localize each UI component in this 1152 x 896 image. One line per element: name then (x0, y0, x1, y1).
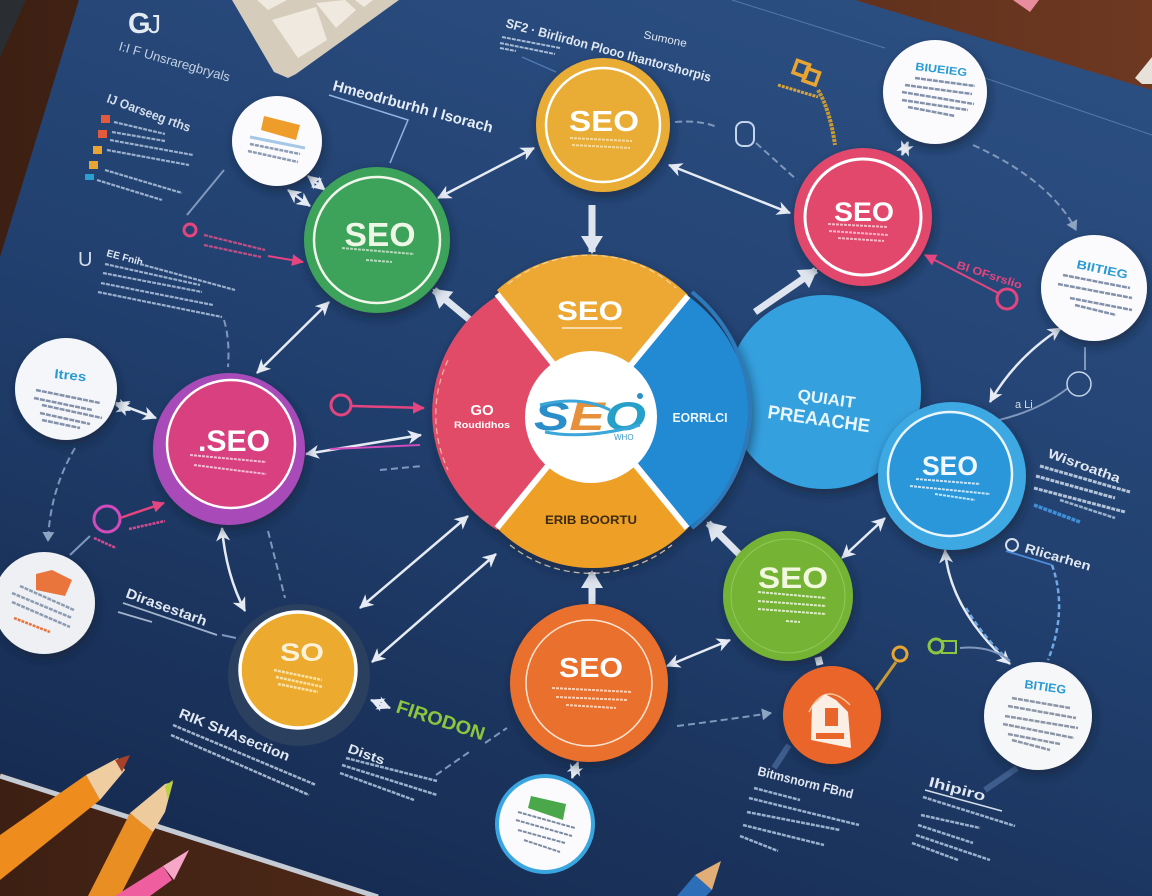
node: purple SEO: .SEO (198, 425, 270, 458)
desk objects: top corners (0, 0, 1152, 84)
thin solid connectors (70, 170, 1085, 661)
wheel labels: GO (470, 402, 494, 419)
node: lime SEO: SEO (758, 562, 828, 595)
heading: middle search label: Hmeodrburhh I Isorach (331, 77, 495, 137)
node: purple SEO (153, 373, 305, 525)
small text block: left middle: U (78, 249, 92, 271)
callout: top right (883, 40, 987, 144)
node: sky blue SEO right: SEO (922, 451, 978, 481)
header title block: I:I F Unsraregbryals (117, 38, 232, 85)
icon: small badge (736, 122, 754, 146)
node: amber SEO bottom left: SO (280, 639, 324, 667)
callout: lower left (0, 552, 95, 654)
node: yellow SEO top: SEO (569, 106, 639, 138)
wheel hub logo: SEO (534, 395, 646, 439)
top heading labels: SF2 · Birlirdon Plooo Ihantorshorpis (504, 15, 713, 85)
small text block: upper left list (85, 91, 193, 200)
icon: orange key top (778, 60, 835, 145)
icon: link chain lower right (876, 639, 956, 690)
label: bottom left text: RIK SHAsection (177, 705, 292, 764)
text block: bottom right (912, 773, 1015, 860)
callout: top left (232, 96, 322, 186)
pencil: orange (0, 755, 130, 880)
pencil: blue (677, 861, 721, 896)
pencil: pink (115, 850, 189, 896)
pencil: amber (88, 780, 173, 896)
text block: right side: Wisroatha (1046, 446, 1123, 486)
header title block: G (128, 8, 151, 40)
callout: bottom right (984, 662, 1092, 770)
green label: FIRODON (393, 697, 487, 745)
small text block: left middle: EE Fnih (105, 248, 144, 269)
small text block: left middle (78, 248, 235, 317)
wheel labels (454, 296, 728, 527)
label: bottom left text (171, 705, 316, 795)
node: pink SEO top right (794, 148, 932, 286)
label: right lower heading: Rlicarhen (1023, 540, 1093, 574)
header title block (117, 8, 232, 85)
wheel hub logo: WHO (614, 433, 634, 442)
small text block: upper left list: IJ Oarseeg rths (105, 91, 193, 135)
callout: bottom (497, 776, 593, 872)
wheel labels: Roudidhos (454, 420, 510, 430)
text block: right side: a Li (1015, 399, 1033, 411)
connector arrows (116, 142, 1061, 778)
node: amber SEO bottom left (228, 604, 370, 746)
node: sky blue SEO right (878, 402, 1026, 550)
node: green SEO (304, 167, 450, 313)
callout: right: BIITIEG (1075, 257, 1129, 282)
central wheel (432, 254, 750, 573)
node: orange SEO bottom (510, 604, 668, 762)
wheel hub logo (525, 351, 657, 483)
heading: middle search label (329, 77, 495, 163)
pink line under purple arrow (330, 445, 420, 449)
label: lower left heading (118, 585, 217, 635)
node: green SEO: SEO (344, 216, 416, 253)
text block: right side (1015, 372, 1130, 522)
fat arrows (434, 205, 820, 665)
header title block: J (148, 9, 161, 39)
blue side circle: quality: PREAACHE (766, 402, 871, 437)
wheel labels: SEO (557, 296, 623, 326)
pink key icon left (94, 503, 165, 548)
pencils (0, 755, 721, 896)
label: right lower heading (1006, 539, 1093, 574)
node: orange icon circle (783, 666, 881, 764)
callout: left: Itres (54, 366, 87, 384)
label: right side pink key (925, 255, 1024, 309)
text block: bottom right centre: Bitmsnorm FBnd (756, 763, 855, 802)
callout: right (1041, 235, 1147, 341)
callout: left (15, 338, 117, 440)
text block: bottom right centre (740, 763, 859, 851)
node: pink SEO top right: SEO (834, 197, 894, 227)
node: lime SEO (723, 531, 853, 661)
callout: top right: BIUEIEG (915, 61, 968, 79)
thin dashed connectors (48, 122, 1076, 775)
label: bottom centre text: Dists (346, 741, 387, 768)
top heading labels: Sumone (642, 29, 688, 50)
blue side circle: quality (727, 295, 921, 489)
node: yellow SEO top (536, 58, 670, 192)
callout: bottom right: BITIEG (1024, 677, 1067, 697)
label: bottom centre text (340, 741, 437, 800)
label: right side pink key: Bl OFsrslio (955, 259, 1024, 292)
faint thick connectors (774, 745, 1017, 790)
pink arrow left of wheel (331, 395, 424, 415)
node: orange SEO bottom: SEO (559, 652, 623, 683)
keyboard (232, 0, 399, 78)
blue side circle: quality: QUIAIT (796, 387, 856, 412)
text block: bottom right: Ihipiro (927, 773, 987, 804)
wheel labels: EORRLCI (672, 410, 728, 425)
label: lower left heading: Dirasestarh (124, 585, 209, 629)
small text block: pink label top left (184, 224, 303, 262)
blue dashed link (966, 565, 1059, 663)
wheel labels: ERIB BOORTU (545, 513, 637, 527)
